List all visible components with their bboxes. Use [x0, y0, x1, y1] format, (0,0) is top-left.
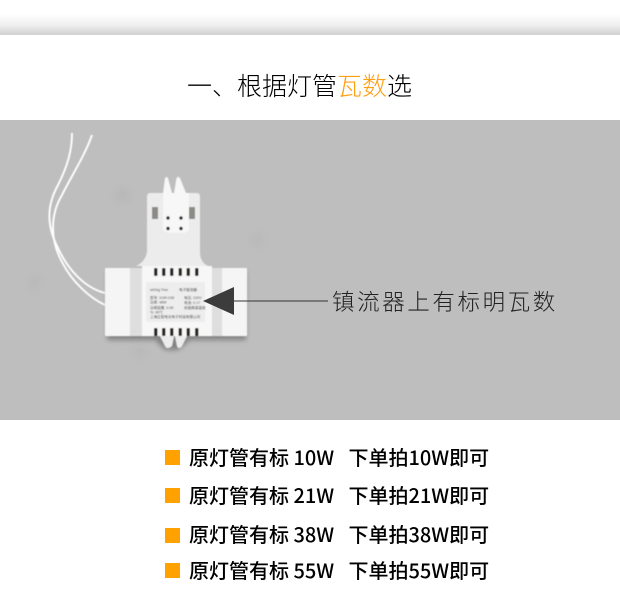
shadow [107, 272, 246, 350]
list row: 38W: 下单拍38W即可 [348, 519, 489, 548]
list row: 38W: 原灯管有标 38W [189, 519, 334, 548]
metal clips [152, 207, 158, 219]
centre block [142, 266, 212, 336]
icon: ballast device: 上海正阳电光电子科技有限公司 [150, 314, 201, 319]
icon: ballast device: 电流: 0.1T [184, 300, 201, 305]
spec label [146, 282, 205, 322]
top shadow band [0, 0, 620, 35]
list row: 55W: 下单拍55W即可 [348, 555, 489, 584]
list row: 10W: 原灯管有标 10W [189, 442, 334, 471]
title: 一、根据灯管瓦数选 [187, 67, 412, 103]
icon: ballast device [49, 133, 247, 350]
main body [105, 268, 247, 336]
vents [154, 268, 198, 336]
arrow pointing at label [203, 287, 328, 315]
icon: ballast device: 功率: 38W [150, 300, 167, 304]
callout text: 镇流器上有标明瓦数 [332, 285, 558, 317]
list row: 10W: 下单拍10W即可 [348, 442, 489, 471]
icon: ballast device: wDing Tree [150, 288, 168, 292]
icon: ballast device: Tc: 60℃ [150, 310, 164, 314]
top plate [136, 193, 208, 266]
lamp connector [163, 177, 189, 233]
photo panel: ballast on grey background [0, 120, 620, 420]
lead wires [49, 133, 105, 305]
icon: ballast device: 电压: 220V [184, 295, 202, 300]
icon: ballast device: 安装简易高效 [184, 305, 206, 310]
icon: ballast device: 型号: XGR-038 [150, 295, 174, 300]
list row: 21W: 下单拍21W即可 [348, 480, 489, 509]
bottom prongs [160, 336, 187, 348]
list row: 38W [165, 519, 489, 548]
list row: 55W: 原灯管有标 55W [189, 555, 334, 584]
icon: ballast device: 功率因素: 0.95 [150, 305, 173, 310]
list row: 21W [165, 480, 489, 509]
list row: 10W [165, 442, 489, 471]
list row: 55W [165, 555, 489, 584]
icon: ballast device: 电子镇流器 [179, 287, 197, 292]
list row: 21W: 原灯管有标 21W [189, 480, 334, 509]
